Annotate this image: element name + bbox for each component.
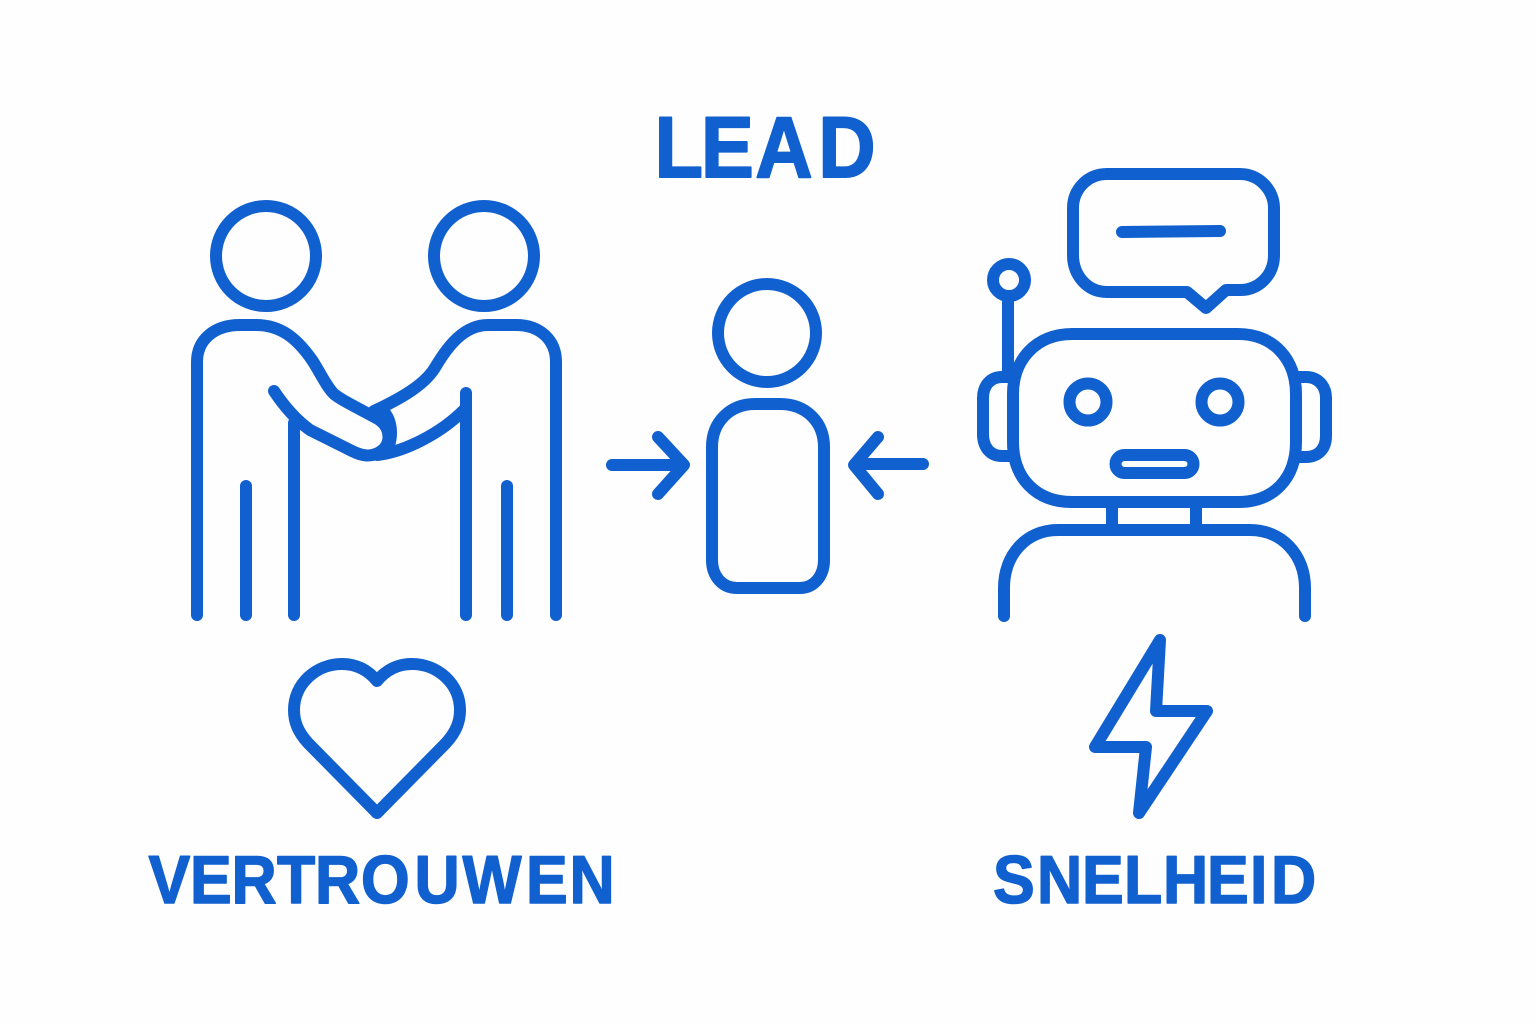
antenna stem bbox=[1002, 298, 1014, 372]
left ear bbox=[983, 377, 1013, 456]
right eye bbox=[1202, 384, 1238, 420]
shoulders bbox=[1004, 530, 1305, 616]
icon: robot with speech bubble bbox=[983, 174, 1326, 616]
arrow: left arrow pointing to person bbox=[612, 437, 684, 494]
label: SNELHEID: SNELHEID bbox=[993, 842, 1316, 918]
label: VERTROUWEN: VERTROUWEN bbox=[148, 842, 615, 918]
mouth bbox=[1116, 455, 1194, 473]
left eye bbox=[1070, 384, 1106, 420]
right ear bbox=[1297, 377, 1326, 457]
robot head bbox=[1013, 334, 1296, 502]
bubble dash bbox=[1122, 231, 1220, 232]
arrow: right arrow pointing to person bbox=[854, 437, 923, 494]
speech bubble bbox=[1073, 174, 1274, 308]
icon: two people shaking hands bbox=[197, 206, 556, 615]
antenna bbox=[993, 264, 1025, 296]
icon: heart bbox=[294, 664, 460, 813]
neck right bbox=[1190, 502, 1202, 530]
neck left bbox=[1106, 502, 1118, 530]
title: LEAD: LEAD bbox=[655, 99, 875, 196]
icon: lightning bolt bbox=[1095, 640, 1207, 813]
icon: central person bbox=[712, 284, 824, 588]
